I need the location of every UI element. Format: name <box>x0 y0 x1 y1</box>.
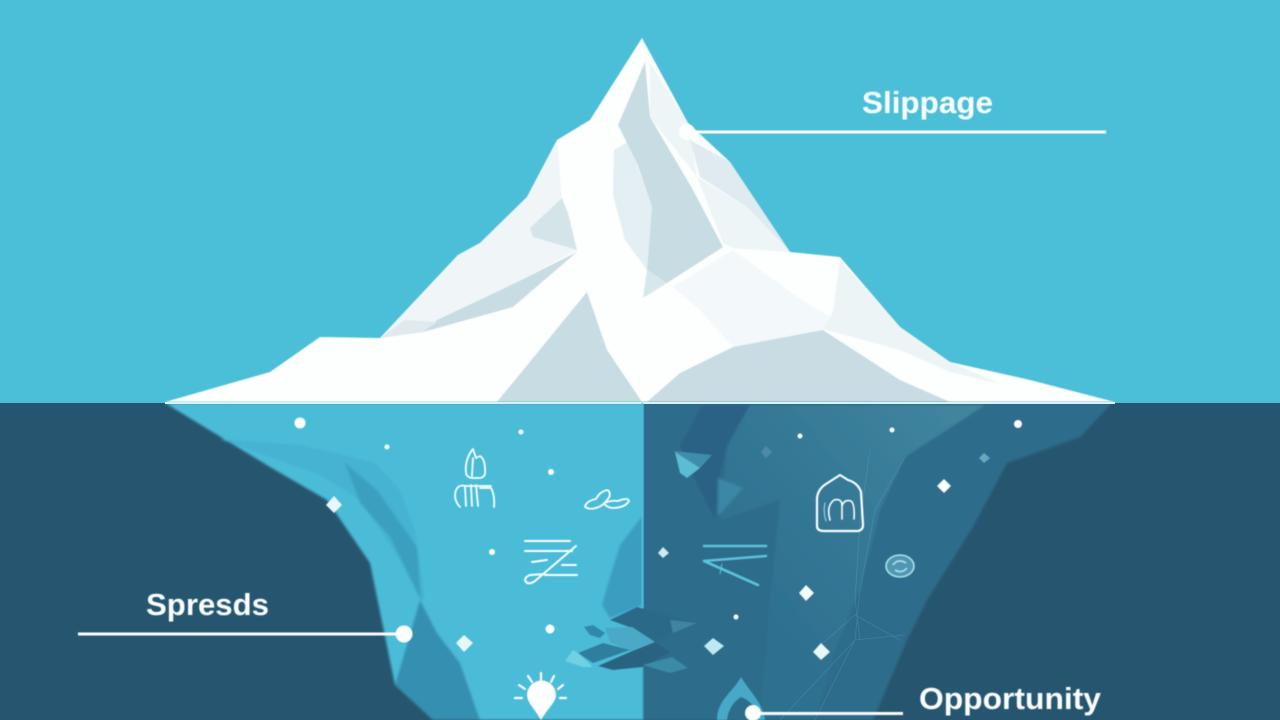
icon: round badge <box>886 555 914 577</box>
faint crystal lines <box>780 450 905 720</box>
callout: Spresds: Spresds <box>146 587 269 622</box>
particles: dots <box>294 418 1022 634</box>
icon: rocket and hands <box>455 449 494 507</box>
iceberg below water: left lit side <box>165 403 644 720</box>
callout: Opportunity: Opportunity <box>919 681 1102 716</box>
waterline <box>165 402 1115 404</box>
particles: diamonds <box>326 446 990 660</box>
callout: Opportunity <box>745 681 1102 720</box>
callout: Slippage <box>679 85 1106 140</box>
seam between lit and shaded side <box>642 403 644 608</box>
iceberg above water <box>165 38 1115 402</box>
icon: light bulb <box>515 673 566 720</box>
icon: house <box>817 475 863 531</box>
iceberg below water: right shaded side <box>644 403 1112 720</box>
icon: clasped shapes <box>585 490 629 509</box>
icon: teal lines <box>704 546 766 585</box>
icon: lines with stylus <box>525 541 577 583</box>
icon: droplet <box>717 677 765 720</box>
callout: Slippage: Slippage <box>862 85 993 120</box>
crystal shards at the centre seam <box>565 607 697 673</box>
callout: Spresds <box>78 587 412 642</box>
icon: paper fan <box>673 451 712 478</box>
